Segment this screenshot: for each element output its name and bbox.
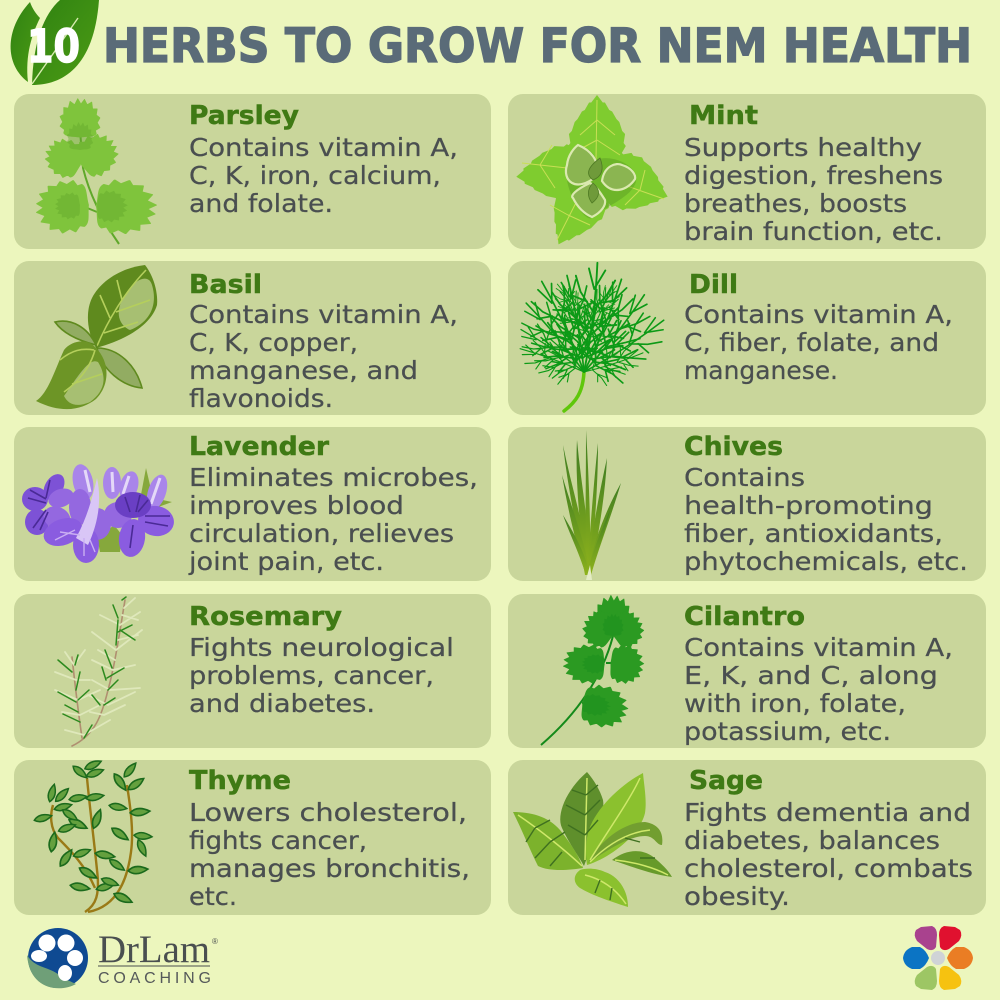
text block [188,463,478,576]
text block [684,798,973,911]
text block: joint pain, etc. [188,547,384,576]
icon: rosemary [55,597,142,746]
panel: Cilantro [508,594,986,748]
text block [189,300,458,413]
text block: Fights neurological [189,633,454,662]
text block [189,798,470,911]
heading: Mint [689,101,758,131]
panel: Rosemary [14,594,491,748]
text block: circulation, relieves [189,519,454,548]
panel: Mint [508,94,986,257]
icon: sage [513,772,672,907]
text block: Fights dementia and [684,798,971,827]
text block: Supports healthy [684,133,922,162]
logo: DrLam Coaching [27,928,218,988]
text block: phytochemicals, etc. [684,547,968,576]
text block: brain function, etc. [684,217,943,246]
text block [189,633,454,718]
text block: C, K, iron, calcium, [189,161,441,190]
text block: cholesterol, combats [684,854,973,883]
panel: Dill [505,259,986,415]
panel: Parsley [14,94,491,249]
panel: Chives [508,427,986,581]
icon: chives [562,430,621,580]
text block: digestion, freshens [684,161,943,190]
text block: Contains [684,463,805,492]
heading: Rosemary [189,602,342,632]
text block: C, K, copper, [189,328,358,357]
panel: Sage [508,760,986,915]
icon: cilantro [541,596,650,745]
text block: E, K, and C, along [684,661,938,690]
icon: parsley [34,99,157,244]
text block: health-promoting [684,491,933,520]
text block: flavonoids. [189,384,333,413]
text block [684,133,943,246]
icon: basil [36,265,157,409]
panel: Basil [14,261,491,415]
icon: mint [514,95,678,257]
heading: Thyme [189,766,291,796]
text block [684,300,953,385]
heading: Lavender [189,432,329,462]
heading: Cilantro [684,602,805,632]
heading: Dill [689,270,738,300]
text block: Contains vitamin A, [189,133,458,162]
icon: thyme [33,758,152,912]
panel: Lavender [14,427,491,581]
icon: lavender [22,462,176,563]
icon: logo flower [27,928,88,988]
text block: fiber, antioxidants, [684,519,943,548]
registered mark: ® [212,937,218,946]
number 10: 10 [27,20,80,73]
icon: dill [505,259,680,411]
heading: Sage [689,766,763,796]
text block: with iron, folate, [684,689,906,718]
text block: fights cancer, [189,826,367,855]
text block: breathes, boosts [684,189,907,218]
icon: title leaves [11,0,99,85]
text block: diabetes, balances [684,826,940,855]
text block [684,463,968,576]
text block: potassium, etc. [684,717,891,746]
heading: Chives [684,432,783,462]
text block: manganese. [684,356,838,385]
text block: manages bronchitis, [189,854,470,883]
text block: improves blood [189,491,404,520]
text block [189,133,458,218]
text block: manganese, and [189,356,418,385]
text block: C, fiber, folate, and [684,328,939,357]
subtitle: COACHING [98,970,211,987]
text block: obesity. [684,882,790,911]
text block: Lowers cholesterol, [189,798,467,827]
panel: Thyme [14,758,491,915]
wordmark: DrLam [98,928,210,971]
text block: Eliminates microbes, [189,463,478,492]
text block: problems, cancer, [189,661,434,690]
heading: Parsley [189,101,299,131]
heading: Basil [189,270,262,300]
text block: etc. [189,882,237,911]
text block [684,633,953,746]
text block: Contains vitamin A, [189,300,458,329]
text block: Contains vitamin A, [684,633,953,662]
text block: and diabetes. [189,689,375,718]
icon: colour flower [903,926,973,990]
text block: and folate. [189,189,333,218]
text block: Contains vitamin A, [684,300,953,329]
